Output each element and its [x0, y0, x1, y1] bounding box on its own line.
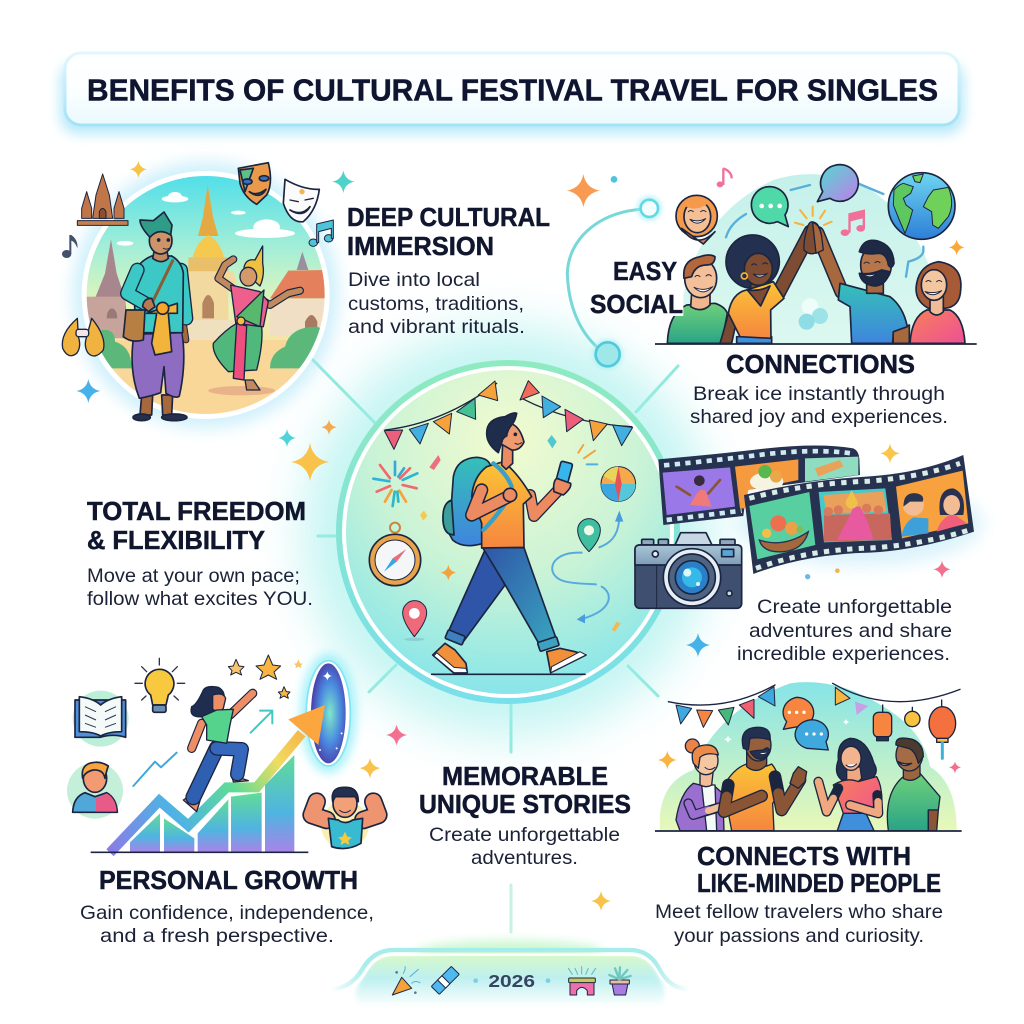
description: stories: [429, 824, 620, 869]
description: immersion: customs, traditions,: [348, 293, 524, 315]
strong man: [312, 787, 378, 849]
description: connections: shared joy and experiences.: [690, 406, 948, 428]
description: freedom: [87, 565, 313, 610]
bubbles: [799, 298, 828, 330]
heading: personal growth: PERSONAL GROWTH: [99, 865, 358, 895]
easy social plate: [612, 260, 678, 285]
compass: [369, 523, 421, 586]
stars: [228, 655, 303, 698]
heading: connects with like-minded people: [655, 841, 943, 947]
heading: personal growth: [80, 865, 374, 947]
heading: memorable unique stories: [419, 761, 631, 869]
description: immersion: and vibrant rituals.: [348, 316, 525, 338]
heading: easy social connections: EASY: [613, 256, 677, 286]
decorative masks and icons: [238, 163, 319, 222]
description: immersion: [348, 269, 525, 338]
heading: easy social connections: CONNECTIONS: [726, 349, 915, 379]
description: memories: Create unforgettable: [757, 596, 952, 618]
ground line: [432, 672, 585, 677]
heading: deep cultural immersion: IMMERSION: [347, 231, 494, 261]
climbing woman: [183, 687, 253, 812]
person: man green: [667, 255, 727, 343]
small arrows: [133, 711, 272, 786]
illustration: cultural immersion: [62, 161, 355, 435]
heading: deep cultural immersion: [347, 202, 550, 338]
person: man green: [887, 738, 940, 831]
description: immersion: Dive into local: [348, 269, 480, 291]
orbit arc: [567, 209, 640, 347]
pink notes: [841, 209, 865, 236]
temple scene: [83, 173, 330, 420]
illustration: easy social connections: [567, 165, 977, 370]
location pin red: [403, 601, 427, 641]
back film strip: [658, 445, 860, 525]
backdrop dome: [660, 682, 957, 830]
person: woman coral: [910, 262, 965, 343]
person: man yellow: [723, 727, 807, 831]
heading: total freedom and flexibility: [87, 496, 313, 610]
high-five rays: [795, 207, 832, 225]
pinwheel: [601, 467, 636, 501]
traveller and festival icons: [369, 381, 636, 674]
description: connections: [690, 383, 948, 428]
heading: easy social connections: SOCIAL: [590, 289, 683, 319]
heading: total freedom and flexibility: TOTAL FREEDOM: [87, 496, 306, 526]
front film strip: [744, 455, 974, 574]
description: connections: Break ice instantly through: [693, 383, 945, 405]
hand lotus ornament: [62, 318, 104, 356]
heading: easy social connections: [590, 256, 948, 428]
growth bars: [130, 755, 294, 852]
separator dot left: [473, 978, 478, 983]
heading: total freedom and flexibility: & FLEXIBILITY: [87, 525, 265, 555]
portal: [300, 653, 357, 773]
heading: connects with like-minded people: LIKE-MINDED PEOPLE: [697, 868, 941, 898]
confetti tube icon: [431, 966, 459, 994]
fireworks: [373, 462, 417, 506]
description: growth: Gain confidence, independence,: [80, 902, 374, 924]
title text: BENEFITS OF CULTURAL FESTIVAL TRAVEL FOR SINGLES: [87, 72, 938, 108]
music note dark: [62, 235, 77, 258]
globe: [888, 173, 955, 239]
person avatar: [67, 762, 123, 819]
footer band: [330, 940, 690, 1007]
description: memories: adventures and share: [749, 620, 952, 642]
description: memories: [737, 596, 952, 665]
raised hands: [804, 222, 823, 254]
description: like-minded: your passions and curiosity.: [674, 925, 924, 947]
heading: memorable unique stories: MEMORABLE: [442, 761, 608, 791]
person: woman purple: [676, 739, 724, 831]
description: growth: and a fresh perspective.: [100, 925, 334, 947]
location pin green: [578, 519, 600, 552]
illustration: like-minded people: [655, 682, 962, 831]
description: like-minded: [655, 901, 943, 947]
central hub circle: [303, 327, 713, 737]
party popper icon: [392, 967, 420, 995]
light bulb: [135, 658, 185, 712]
person: man teal: [817, 233, 909, 343]
description: like-minded: Meet fellow travelers who share: [655, 901, 943, 923]
festival gate icon: [568, 967, 596, 995]
camera: [635, 533, 742, 608]
description: stories: adventures.: [471, 847, 578, 869]
plant pot icon: [609, 967, 631, 995]
face top left: [676, 195, 717, 244]
baseline: [655, 341, 977, 346]
chat bubbles: [751, 165, 858, 227]
separator dot right: [546, 978, 550, 983]
description: freedom: follow what excites YOU.: [87, 588, 313, 610]
year: 2026: [488, 971, 535, 991]
sparkles: [130, 161, 147, 178]
heading: memorable unique stories: UNIQUE STORIES: [419, 789, 631, 819]
title banner: [60, 53, 964, 134]
illustration: film strips and camera: [635, 443, 983, 608]
description: stories: Create unforgettable: [429, 824, 620, 846]
sparkles scattered around hub: [278, 420, 710, 911]
connector lines from hub to benefits: [313, 360, 678, 932]
route path: [552, 522, 619, 619]
confetti: [429, 455, 441, 470]
music note blue: [309, 220, 333, 246]
small temple: [77, 174, 128, 225]
speech bubbles: [783, 697, 828, 750]
description: freedom: Move at your own pace;: [87, 565, 300, 587]
book icon: [73, 691, 129, 747]
description: memories: incredible experiences.: [737, 643, 950, 665]
heading: deep cultural immersion: DEEP CULTURAL: [347, 202, 550, 232]
illustration: personal growth: [67, 653, 407, 853]
person: woman pink: [818, 738, 882, 831]
heading: connects with like-minded people: CONNECTS WITH: [697, 841, 911, 871]
person: woman yellow: [720, 232, 811, 343]
dancer: [213, 246, 300, 390]
man in traditional dress: [123, 212, 187, 421]
lanterns: [873, 700, 956, 758]
traveller figure: [433, 413, 586, 673]
growth arrow: [110, 705, 325, 853]
description: growth: [80, 902, 374, 947]
string lights and flags: [668, 683, 960, 727]
bunting: [384, 381, 633, 449]
